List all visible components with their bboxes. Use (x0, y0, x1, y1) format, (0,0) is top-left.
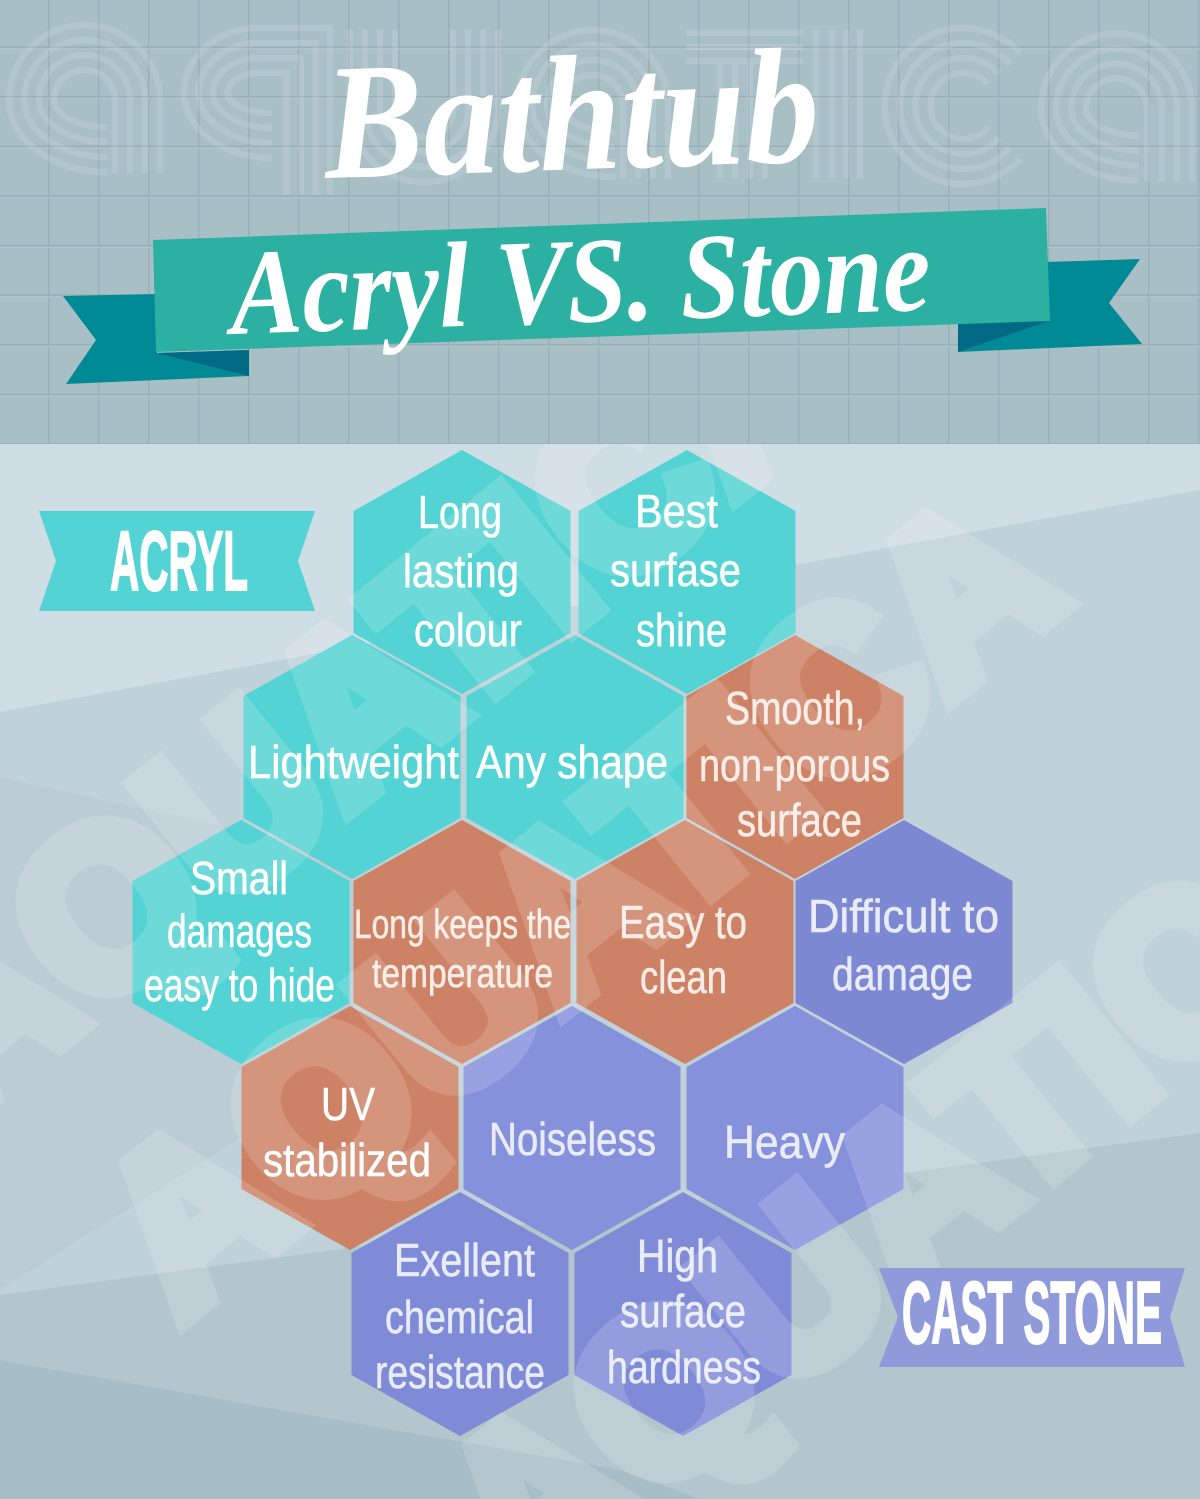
watermark: AQUATICA diagonal lettering: AQUATICA (52, 443, 1102, 1360)
ribbon banner: Acryl VS. Stone: Acryl VS. Stone (222, 202, 933, 361)
hexagon: Best surfase shine: Best (635, 485, 718, 537)
ribbon banner: Acryl VS. Stone (63, 202, 1142, 384)
hexagon: Smooth, non-porous surface (686, 635, 904, 879)
hexagon: UV stabilized: UV (321, 1078, 375, 1130)
hexagon: Long lasting colour: lasting (403, 545, 519, 597)
panel: faceted lower background (0, 444, 1200, 1499)
hexagon: Exellent chemical resistance: resistance (375, 1346, 545, 1398)
hexagon: Any shape (466, 635, 684, 879)
hexagon: Easy to clean: Easy to (619, 896, 747, 948)
hexagon: Best surfase shine (578, 450, 796, 694)
panel: tiled header background (0, 0, 1200, 444)
hexagon: Long keeps the temperature: temperature (372, 950, 553, 996)
label banner: ACRYL: ACRYL (110, 514, 248, 608)
hexagon: Long lasting colour (354, 450, 570, 694)
hexagon: High surface hardness: High (637, 1230, 718, 1282)
label banner: ACRYL (39, 511, 315, 611)
hexagon: Easy to clean: clean (640, 951, 727, 1003)
hexagon: UV stabilized (242, 1006, 458, 1250)
hexagon: Smooth, non-porous surface: surface (737, 794, 862, 846)
hexagon: High surface hardness: hardness (607, 1341, 761, 1393)
hexagon: Noiseless (464, 1006, 680, 1250)
hexagon: Heavy (686, 1006, 904, 1250)
hexagon: Lightweight (244, 635, 460, 879)
hexagon: Any shape: Any shape (476, 736, 668, 788)
hexagon: Exellent chemical resistance: chemical (385, 1291, 534, 1343)
hexagon: Long lasting colour: colour (414, 604, 522, 656)
hexagon: Exellent chemical resistance: Exellent (394, 1234, 535, 1286)
title: Bathtub (319, 14, 822, 214)
hexagon: Easy to clean (576, 820, 794, 1064)
hexagon: Noiseless: Noiseless (489, 1113, 656, 1165)
hexagon: Difficult to damage: damage (832, 948, 973, 1000)
hexagon: Small damages easy to hide: Small (190, 852, 288, 904)
hexagon: High surface hardness (574, 1192, 792, 1436)
hexagon: Small damages easy to hide: easy to hide (144, 959, 335, 1011)
hexagon: Small damages easy to hide: damages (167, 905, 312, 957)
hexagon: Lightweight: Lightweight (248, 736, 459, 788)
hexagon: Smooth, non-porous surface: Smooth, (725, 682, 865, 734)
hexagon: Long keeps the temperature (354, 820, 571, 1064)
hexagon: Long keeps the temperature: Long keeps the (354, 901, 571, 947)
hexagon: Difficult to damage (796, 820, 1012, 1064)
hexagon: Heavy: Heavy (724, 1116, 845, 1168)
hexagon: Smooth, non-porous surface: non-porous (699, 739, 890, 791)
hexagon: High surface hardness: surface (620, 1285, 746, 1337)
hexagon: Best surfase shine: surfase (610, 544, 741, 596)
hexagon: Exellent chemical resistance (352, 1192, 568, 1436)
hexagon: Small damages easy to hide (132, 820, 350, 1064)
hexagon: Best surfase shine: shine (636, 604, 727, 656)
hexagon: UV stabilized: stabilized (263, 1134, 431, 1186)
hexagon: Long lasting colour: Long (418, 486, 502, 538)
decorative concentric line pattern (9, 25, 1192, 195)
hexagon: Difficult to damage: Difficult to (808, 890, 999, 942)
